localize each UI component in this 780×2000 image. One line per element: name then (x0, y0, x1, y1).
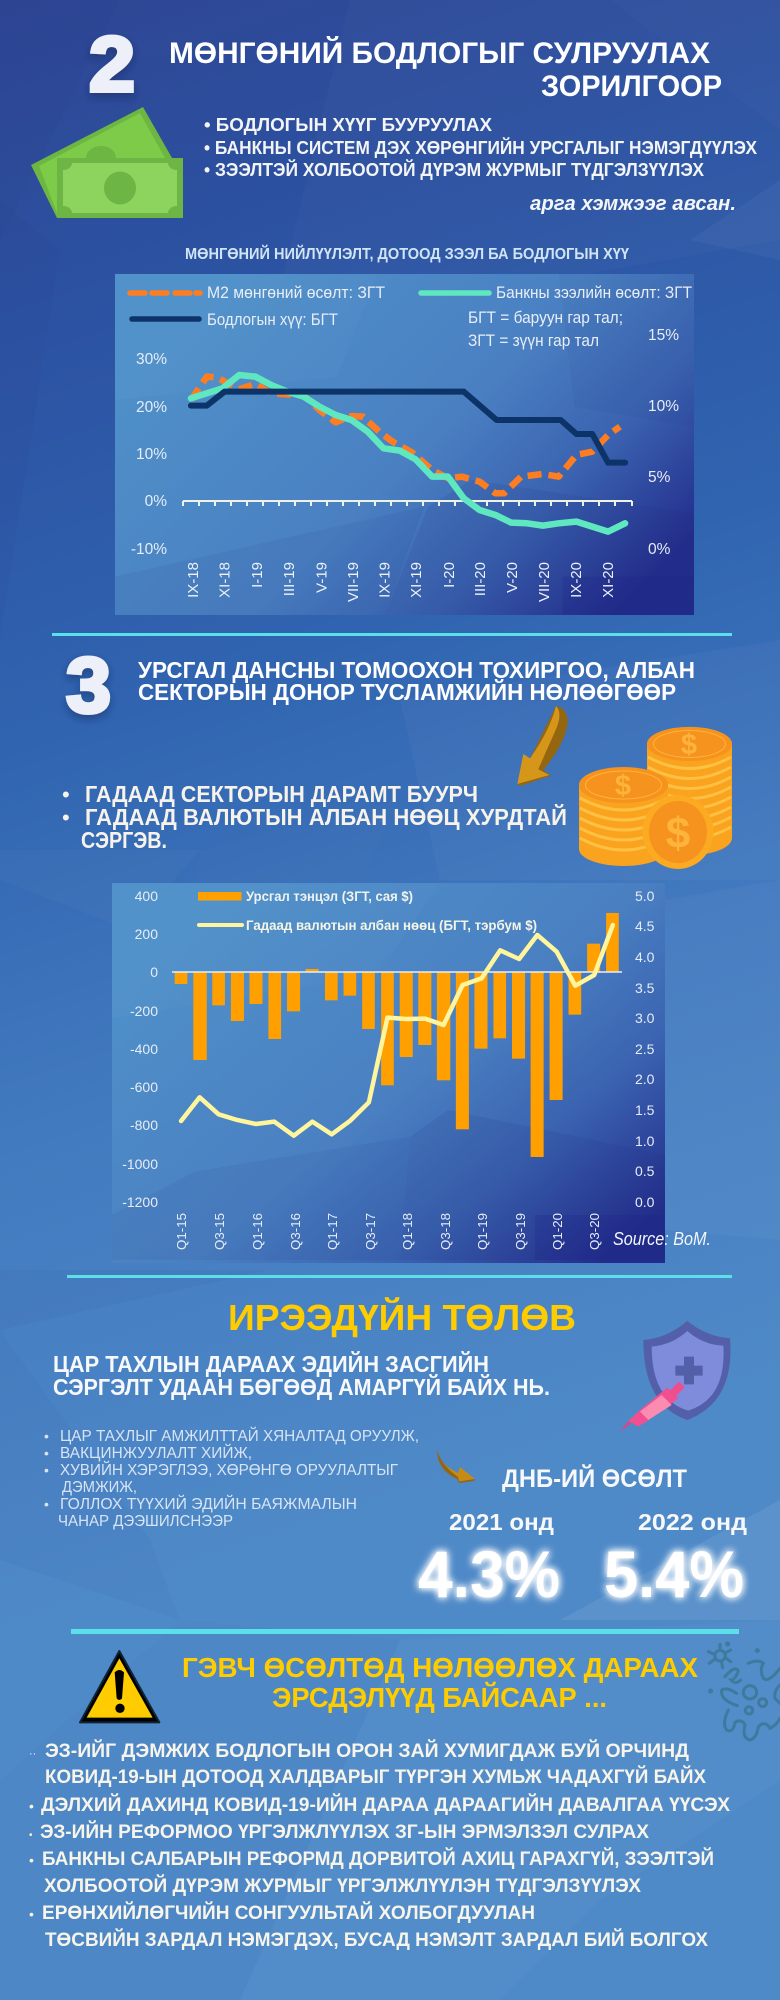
x axis labels: Q1-18 (400, 1213, 415, 1250)
closing phrase: арга хэмжээг авсан. (530, 193, 736, 215)
icon: warning triangle (80, 1651, 159, 1722)
left axis labels: -800 (130, 1117, 158, 1133)
vaccine bullets: ЦАР ТАХЛЫГ АМЖИЛТТАЙ ХЯНАЛТАД ОРУУЛЖ, (60, 1426, 419, 1445)
right axis labels: 3.0 (635, 1010, 655, 1026)
vaccine bullets: ДЭМЖИЖ, (62, 1479, 137, 1496)
left axis labels (122, 888, 158, 1210)
right axis labels: 0% (648, 541, 671, 558)
section 3 title (138, 657, 695, 705)
policy bullet list: • БАНКНЫ СИСТЕМ ДЭХ ХӨРӨНГИЙН УРСГАЛЫГ НЭМЭГДҮҮЛЭХ (204, 137, 757, 158)
policy bullet list (204, 115, 757, 180)
chart 1 legend: ЗГТ = зүүн гар тал (468, 331, 599, 350)
left axis labels: 400 (135, 888, 158, 904)
section 2 title: ЗОРИЛГООР (541, 70, 722, 103)
right axis labels: 10% (648, 398, 679, 415)
front stack: $ (615, 770, 631, 802)
right axis labels: 4.5 (635, 918, 655, 934)
section 2 title: МӨНГӨНИЙ БОДЛОГЫГ СУЛРУУЛАХ (169, 36, 710, 70)
risks list: ЕРӨНХИЙЛӨГЧИЙН СОНГУУЛЬТАЙ ХОЛБОГДУУЛАН (42, 1900, 535, 1924)
line: M2 money growth (191, 377, 620, 493)
right axis labels: 5.0 (635, 888, 655, 904)
icon: money bills (31, 107, 183, 218)
external sector bullets (62, 781, 567, 853)
vaccine bullets: ГОЛЛОХ ТҮҮХИЙ ЭДИЙН БАЯЖМАЛЫН (60, 1494, 357, 1513)
right axis labels: 5% (648, 469, 671, 486)
right axis labels: 3.5 (635, 980, 655, 996)
zero line (172, 971, 622, 973)
chart 1 legend: БГТ = баруун гар тал; (468, 308, 623, 327)
panel: money supply line chart (115, 274, 694, 615)
left axis labels: 10% (136, 446, 167, 463)
risks list: ЭЗ-ИЙГ ДЭМЖИХ БОДЛОГЫН ОРОН ЗАЙ ХУМИГДАЖ БУЙ ОРЧИНД (45, 1738, 689, 1762)
back stack: $ (681, 729, 697, 761)
x axis labels: XI-19 (408, 562, 425, 598)
risks list: ЭЗ-ИЙН РЕФОРМОО ҮРГЭЛЖЛҮҮЛЭХ ЗГ-ЫН ЭРМЭЛЗЭЛ СУЛРАХ (40, 1819, 649, 1843)
x axis labels: VII-20 (536, 562, 553, 602)
external sector bullets: ГАДААД ВАЛЮТЫН АЛБАН НӨӨЦ ХУРДТАЙ (85, 803, 567, 830)
x axis labels (185, 562, 617, 602)
x axis labels: I-20 (441, 562, 458, 588)
standing coin (642, 795, 714, 869)
left axis labels: 0 (150, 964, 158, 980)
x axis labels: Q3-20 (587, 1213, 602, 1250)
left axis labels: -1000 (122, 1156, 158, 1172)
outlook subtitle: СЭРГЭЛТ УДААН БӨГӨӨД АМАРГҮЙ БАЙХ НЬ. (53, 1373, 550, 1400)
right axis labels (635, 888, 655, 1210)
standing coin: $ (666, 809, 690, 858)
x axis labels: VII-19 (345, 562, 362, 602)
divider (71, 1629, 739, 1634)
year labels (449, 1509, 747, 1535)
right axis labels: 4.0 (635, 949, 655, 965)
right axis labels: 0.5 (635, 1163, 655, 1179)
external sector bullets: ГАДААД СЕКТОРЫН ДАРАМТ БУУРЧ (85, 781, 478, 807)
chart 2 legend (198, 888, 537, 933)
vaccine bullets: • (44, 1428, 49, 1444)
x axis labels: Q3-15 (212, 1213, 227, 1250)
section 3: current account (62, 641, 732, 869)
divider (67, 1275, 732, 1278)
outlook subtitle: ЦАР ТАХЛЫН ДАРААХ ЭДИЙН ЗАСГИЙН (53, 1350, 489, 1377)
section number 3: 3 (66, 641, 111, 729)
section 3 title: СЕКТОРЫН ДОНОР ТУСЛАМЖИЙН НӨЛӨӨГӨӨР (138, 678, 676, 705)
GDP growth values (418, 1537, 744, 1611)
x axis labels: III-19 (281, 562, 298, 596)
right axis labels (648, 327, 679, 558)
vaccine bullets: ВАКЦИНЖУУЛАЛТ ХИЙЖ, (60, 1443, 252, 1462)
front stack (579, 767, 668, 866)
chart 1 legend (130, 283, 692, 350)
external sector bullets: СЭРГЭВ. (81, 827, 167, 853)
arrow: gold curved (517, 706, 568, 786)
vaccine bullets: ЧАНАР ДЭЭШИЛСНЭЭР (58, 1513, 233, 1530)
chart 2 legend: Гадаад валютын албан нөөц (БГТ, тэрбум $) (246, 917, 537, 933)
left axis labels: -10% (131, 541, 167, 558)
left axis labels: 30% (136, 351, 167, 368)
x axis labels: III-20 (472, 562, 489, 596)
section 2: monetary policy (31, 20, 757, 218)
policy bullet list: • ЗЭЭЛТЭЙ ХОЛБООТОЙ ДҮРЭМ ЖУРМЫГ ТҮДГЭЛЗҮҮЛЭХ (204, 159, 704, 180)
outlook subtitle (53, 1350, 550, 1400)
icon: shield and syringe (620, 1321, 730, 1432)
left axis labels: 0% (145, 493, 167, 510)
left axis labels: -400 (130, 1041, 158, 1057)
x axis labels: Q1-16 (250, 1213, 265, 1250)
section: risks (29, 1643, 780, 1951)
risks list: ДЭЛХИЙ ДАХИНД КОВИД-19-ИЙН ДАРАА ДАРААГИЙН ДАВАЛГАА ҮҮСЭХ (41, 1792, 730, 1816)
x axis labels (174, 1213, 602, 1250)
risks list: • (29, 1830, 33, 1841)
x axis labels: Q3-17 (363, 1213, 378, 1250)
year labels: 2021 онд (449, 1509, 554, 1535)
left axis labels: 20% (136, 399, 167, 416)
right axis labels: 2.0 (635, 1071, 655, 1087)
risks title (182, 1652, 698, 1713)
right axis labels: 1.5 (635, 1102, 655, 1118)
section 3 title: УРСГАЛ ДАНСНЫ ТОМООХОН ТОХИРГОО, АЛБАН (138, 657, 695, 683)
x axis labels: V-20 (504, 562, 521, 593)
x axis labels: IX-18 (185, 562, 202, 598)
vaccine bullets: ХУВИЙН ХЭРЭГЛЭЭ, ХӨРӨНГӨ ОРУУЛАЛТЫГ (60, 1460, 398, 1479)
section number 2: 2 (89, 20, 135, 108)
vaccine bullets: • (44, 1496, 49, 1512)
vaccine bullets (44, 1426, 419, 1530)
x axis labels: V-19 (314, 562, 330, 593)
right axis labels: 2.5 (635, 1041, 655, 1057)
x axis labels: XI-18 (216, 562, 234, 598)
x axis labels: Q1-17 (325, 1213, 340, 1250)
left axis labels: -1200 (122, 1194, 158, 1210)
left axis labels (131, 351, 167, 558)
x axis labels: IX-20 (568, 562, 585, 598)
panel: current account bar and reserves chart (112, 883, 711, 1263)
risks title: ЭРСДЭЛҮҮД БАЙСААР ... (272, 1681, 607, 1713)
risks list: • (29, 1852, 34, 1868)
x axis labels: Q1-15 (174, 1213, 189, 1250)
vaccine bullets: • (44, 1462, 49, 1478)
chart 1 legend: Банкны зээлийн өсөлт: ЗГТ (496, 283, 692, 302)
GDP growth values: 4.3% (418, 1537, 560, 1611)
risks list: ТӨСВИЙН ЗАРДАЛ НЭМЭГДЭХ, БУСАД НЭМЭЛТ ЗАРДАЛ БИЙ БОЛГОХ (45, 1927, 708, 1951)
vaccine bullets: • (44, 1445, 49, 1461)
x axis labels: Q1-20 (550, 1213, 565, 1250)
left axis labels: -600 (130, 1079, 158, 1095)
left axis labels: 200 (135, 926, 158, 942)
x axis labels: Q3-19 (513, 1213, 528, 1250)
section 2 title (169, 36, 722, 103)
chart 1 legend: Бодлогын хүү: БГТ (207, 310, 338, 329)
line: bank loan growth (191, 375, 625, 532)
risks list: БАНКНЫ САЛБАРЫН РЕФОРМД ДОРВИТОЙ АХИЦ ГАРАХГҮЙ, ЗЭЭЛТЭЙ (42, 1846, 714, 1870)
outlook title: ИРЭЭДҮЙН ТӨЛӨВ (228, 1296, 576, 1338)
line: policy rate (191, 392, 625, 463)
x axis labels: IX-19 (376, 562, 394, 598)
left axis labels: -200 (130, 1003, 158, 1019)
chart 2 legend: Урсгал тэнцэл (ЗГТ, сая $) (246, 888, 413, 904)
x axis labels: I-19 (249, 562, 266, 588)
risks list: КОВИД-19-ЫН ДОТООД ХАЛДВАРЫГ ТҮРГЭН ХУМЬЖ ЧАДАХГҮЙ БАЙХ (45, 1764, 706, 1788)
risks list: ·· (29, 1748, 36, 1760)
divider (52, 633, 732, 636)
icon: virus (708, 1643, 780, 1740)
arrow: small gold (437, 1449, 475, 1483)
current account bars (175, 913, 619, 1157)
right axis labels: 15% (648, 327, 679, 344)
risks list: ХОЛБООТОЙ ДҮРЭМ ЖУРМЫГ ҮРГЭЛЖЛҮҮЛЭН ТҮДГЭЛЗҮҮЛЭХ (44, 1873, 641, 1897)
x axis (183, 501, 632, 506)
right axis labels: 0.0 (635, 1194, 655, 1210)
x axis labels: Q1-19 (475, 1213, 490, 1250)
x axis labels: XI-20 (600, 562, 617, 598)
right axis labels: 1.0 (635, 1133, 655, 1149)
year labels: 2022 онд (638, 1509, 747, 1535)
section: outlook (44, 1296, 747, 1611)
GDP growth heading: ДНБ-ИЙ ӨСӨЛТ (502, 1463, 687, 1493)
risks list: • (29, 1906, 34, 1922)
chart 1 heading: МӨНГӨНИЙ НИЙЛҮҮЛЭЛТ, ДОТООД ЗЭЭЛ БА БОДЛОГЫН ХҮҮ (185, 245, 629, 263)
external sector bullets: • (62, 805, 70, 830)
risks list (29, 1738, 730, 1951)
risks title: ГЭВЧ ӨСӨЛТӨД НӨЛӨӨЛӨХ ДАРААХ (182, 1652, 698, 1683)
x axis labels: Q3-18 (438, 1213, 453, 1250)
GDP growth values: 5.4% (604, 1537, 744, 1611)
icon: gold coins (579, 727, 732, 869)
chart 1 legend: М2 мөнгөний өсөлт: ЗГТ (207, 283, 385, 302)
policy bullet list: • БОДЛОГЫН ХҮҮГ БУУРУУЛАХ (204, 115, 492, 135)
risks list: • (29, 1798, 34, 1814)
external sector bullets: • (62, 782, 70, 807)
back stack (647, 727, 732, 855)
source note: Source: BoM. (613, 1229, 711, 1249)
x axis labels: Q3-16 (288, 1213, 303, 1250)
line: FX reserves (181, 925, 613, 1136)
